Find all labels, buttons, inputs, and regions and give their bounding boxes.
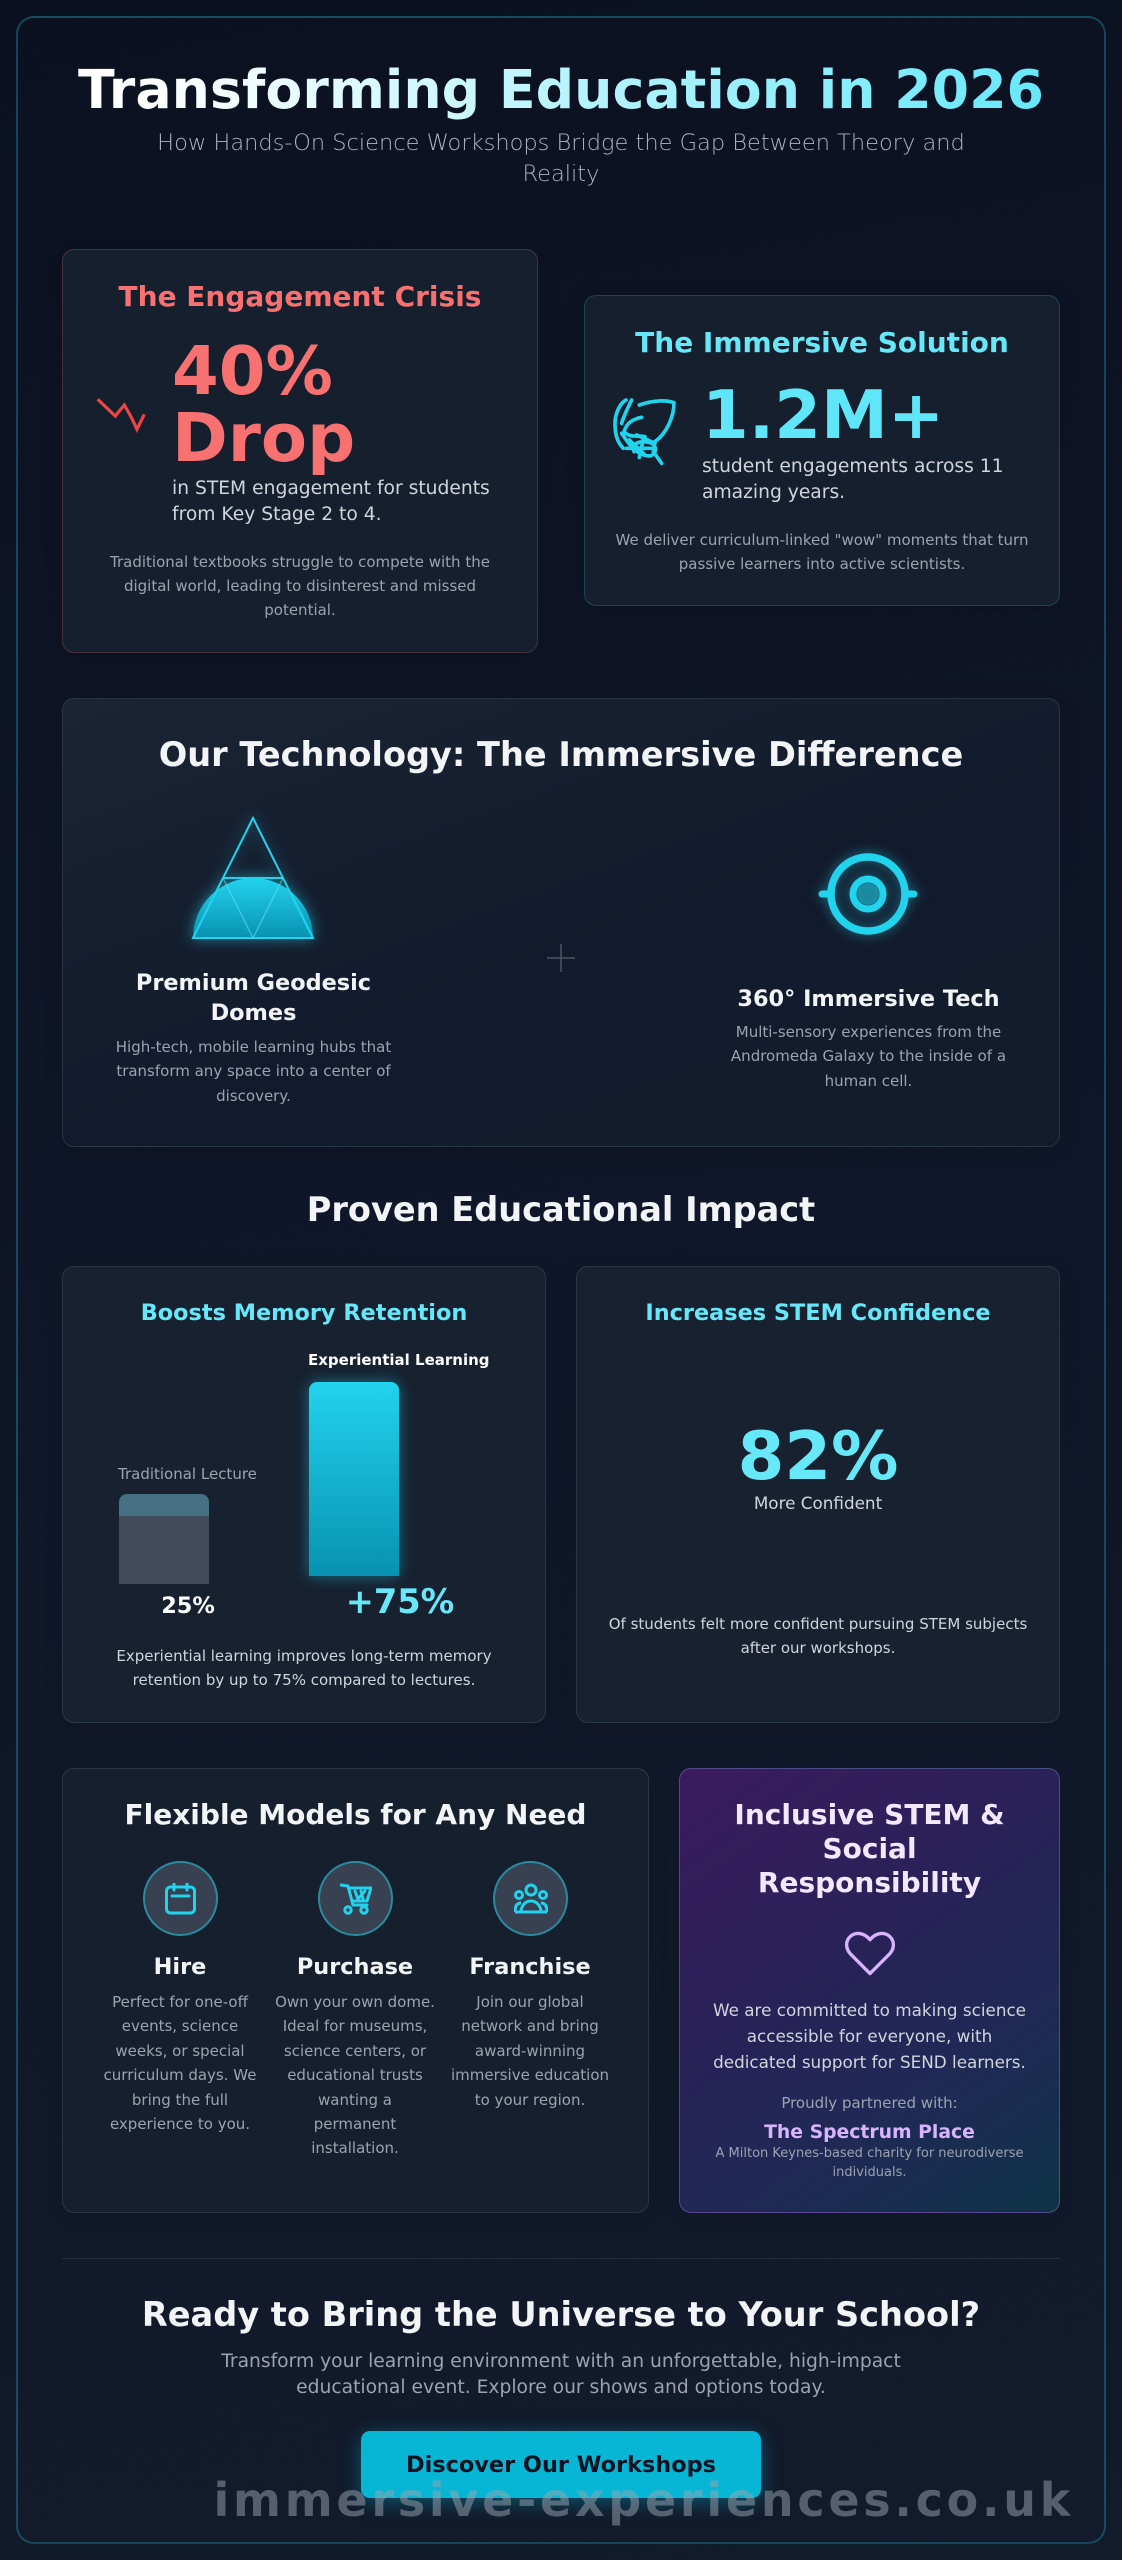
heading: Our Technology: The Immersive Difference [159, 735, 963, 774]
body text: accessible for everyone, with [747, 2026, 992, 2046]
description: events, science [122, 2017, 238, 2035]
description: immersive education [451, 2066, 609, 2084]
description: to your region. [475, 2091, 585, 2109]
domes title [136, 970, 371, 1026]
domes description [116, 1038, 391, 1105]
description [104, 1993, 256, 2133]
stat description: in STEM engagement for students [172, 478, 490, 499]
body text [713, 2000, 1026, 2072]
bar label: traditional: Traditional Lecture [118, 1465, 257, 1483]
heading: Social [822, 1832, 917, 1865]
stat description [172, 478, 490, 525]
supporting text: We deliver curriculum-linked "wow" moments that turn [616, 531, 1028, 549]
caption [116, 1647, 492, 1689]
icon: calendar [142, 1861, 218, 1936]
supporting text [616, 531, 1028, 573]
column: franchise [451, 1861, 609, 2109]
description: educational trusts [287, 2066, 423, 2084]
heading: Increases STEM Confidence [645, 1300, 991, 1326]
domes title: Domes [211, 1000, 296, 1026]
icon: declining trend line [96, 398, 146, 433]
cta text: educational event. Explore our shows and options today. [296, 2377, 826, 2398]
icon: geodesic dome [185, 816, 321, 948]
heading: Boosts Memory Retention [141, 1300, 467, 1326]
big stat: Drop [172, 399, 355, 477]
big stat: 40% [172, 332, 333, 410]
supporting text: Of students felt more confident pursuing STEM subjects [609, 1615, 1027, 1633]
icon: people group [492, 1861, 568, 1936]
description [451, 1993, 609, 2109]
title: Franchise [469, 1954, 591, 1980]
description: weeks, or special [115, 2042, 245, 2060]
bar chart [118, 1351, 490, 1621]
panel: boosts memory retention [62, 1266, 546, 1723]
panel: inclusive stem [679, 1768, 1060, 2213]
icon: brain scribble [613, 398, 676, 466]
heading: Flexible Models for Any Need [125, 1798, 586, 1831]
heading: The Engagement Crisis [119, 280, 481, 313]
panel: the immersive solution [584, 295, 1060, 606]
360 description [731, 1023, 1006, 1090]
subtitle [157, 130, 965, 186]
description: installation. [311, 2139, 399, 2157]
body text: We are committed to making science [713, 2000, 1026, 2020]
description [275, 1993, 435, 2157]
description: bring the full [132, 2091, 228, 2109]
button: Discover Our Workshops [406, 2452, 716, 2478]
supporting text [609, 1615, 1027, 1657]
stat description: amazing years. [702, 482, 845, 503]
value: 25%: 25% [161, 1593, 215, 1619]
description: science centers, or [284, 2042, 426, 2060]
description: permanent [314, 2115, 396, 2133]
title: Hire [154, 1954, 206, 1980]
domes description: High-tech, mobile learning hubs that [116, 1038, 391, 1056]
caption: retention by up to 75% compared to lectures. [133, 1671, 475, 1689]
360 description: human cell. [825, 1072, 912, 1090]
big stat [172, 332, 355, 477]
bar: traditional lecture [119, 1494, 209, 1584]
stat description: from Key Stage 2 to 4. [172, 504, 382, 525]
supporting text: digital world, leading to disinterest and missed [124, 577, 476, 595]
caption: Experiential learning improves long-term memory [116, 1647, 492, 1665]
panel: the engagement crisis [62, 249, 538, 653]
section heading: proven impact: Proven Educational Impact [307, 1190, 815, 1229]
value: +75%: +75% [346, 1582, 454, 1621]
partner name: The Spectrum Place [764, 2122, 975, 2143]
360 description: Multi-sensory experiences from the [736, 1023, 1001, 1041]
column: hire [104, 1861, 256, 2133]
360 title: 360° Immersive Tech [737, 986, 1000, 1012]
panel: flexible models [62, 1768, 649, 2213]
360 description: Andromeda Galaxy to the inside of a [731, 1047, 1006, 1065]
domes description: transform any space into a center of [116, 1062, 391, 1080]
description: Join our global [476, 1993, 584, 2011]
icon: shopping cart [318, 1861, 392, 1936]
stat description [702, 456, 1004, 503]
supporting text: passive learners into active scientists. [679, 555, 965, 573]
stat description: student engagements across 11 [702, 456, 1004, 477]
heading: The Immersive Solution [635, 326, 1009, 359]
description: experience to you. [110, 2115, 250, 2133]
website watermark: immersive-experiences.co.uk [214, 2472, 1074, 2526]
panel: increases stem confidence [576, 1266, 1060, 1723]
heading [734, 1798, 1005, 1899]
body text: dedicated support for SEND learners. [713, 2052, 1026, 2072]
cta text [221, 2351, 901, 2398]
subtitle: How Hands-On Science Workshops Bridge the Gap Between Theory and [157, 130, 965, 156]
button [361, 2431, 761, 2498]
description: Own your own dome. [275, 1993, 435, 2011]
plus connector [547, 944, 575, 972]
description: Perfect for one-off [112, 1993, 248, 2011]
big stat: 82% [738, 1417, 898, 1495]
supporting text: after our workshops. [741, 1639, 895, 1657]
partner description: individuals. [832, 2165, 906, 2180]
description: wanting a [318, 2091, 392, 2109]
column: purchase [275, 1861, 435, 2157]
supporting text: potential. [264, 601, 336, 619]
cta heading: Ready to Bring the Universe to Your School? [142, 2295, 980, 2334]
description: curriculum days. We [104, 2066, 256, 2084]
description: Ideal for museums, [283, 2017, 427, 2035]
call to action [142, 2295, 980, 2512]
supporting text [110, 552, 490, 619]
partner description [716, 2146, 1023, 2180]
domes description: discovery. [216, 1087, 291, 1105]
bar label: experiential: Experiential Learning [308, 1351, 490, 1369]
icon: heart [844, 1932, 896, 1976]
panel: our technology [62, 698, 1060, 1147]
heading: Responsibility [758, 1866, 981, 1899]
partner description: A Milton Keynes-based charity for neurodiverse [716, 2146, 1023, 2161]
domes title: Premium Geodesic [136, 970, 371, 996]
description: network and bring [461, 2017, 599, 2035]
subtitle: Reality [523, 160, 599, 186]
icon: 360 projector lens [814, 846, 922, 942]
heading: Inclusive STEM & [734, 1798, 1005, 1831]
description: award-winning [475, 2042, 585, 2060]
partner label: Proudly partnered with: [781, 2094, 958, 2112]
stat label: More Confident [754, 1493, 882, 1513]
header [78, 58, 1044, 186]
title: Purchase [297, 1954, 413, 1980]
bar: experiential learning [308, 1382, 398, 1576]
title: Transforming Education in 2026 [78, 58, 1044, 121]
big stat: 1.2M+ [702, 376, 944, 454]
cta text: Transform your learning environment with an unforgettable, high-impact [221, 2351, 901, 2372]
supporting text: Traditional textbooks struggle to compete with the [110, 552, 490, 570]
